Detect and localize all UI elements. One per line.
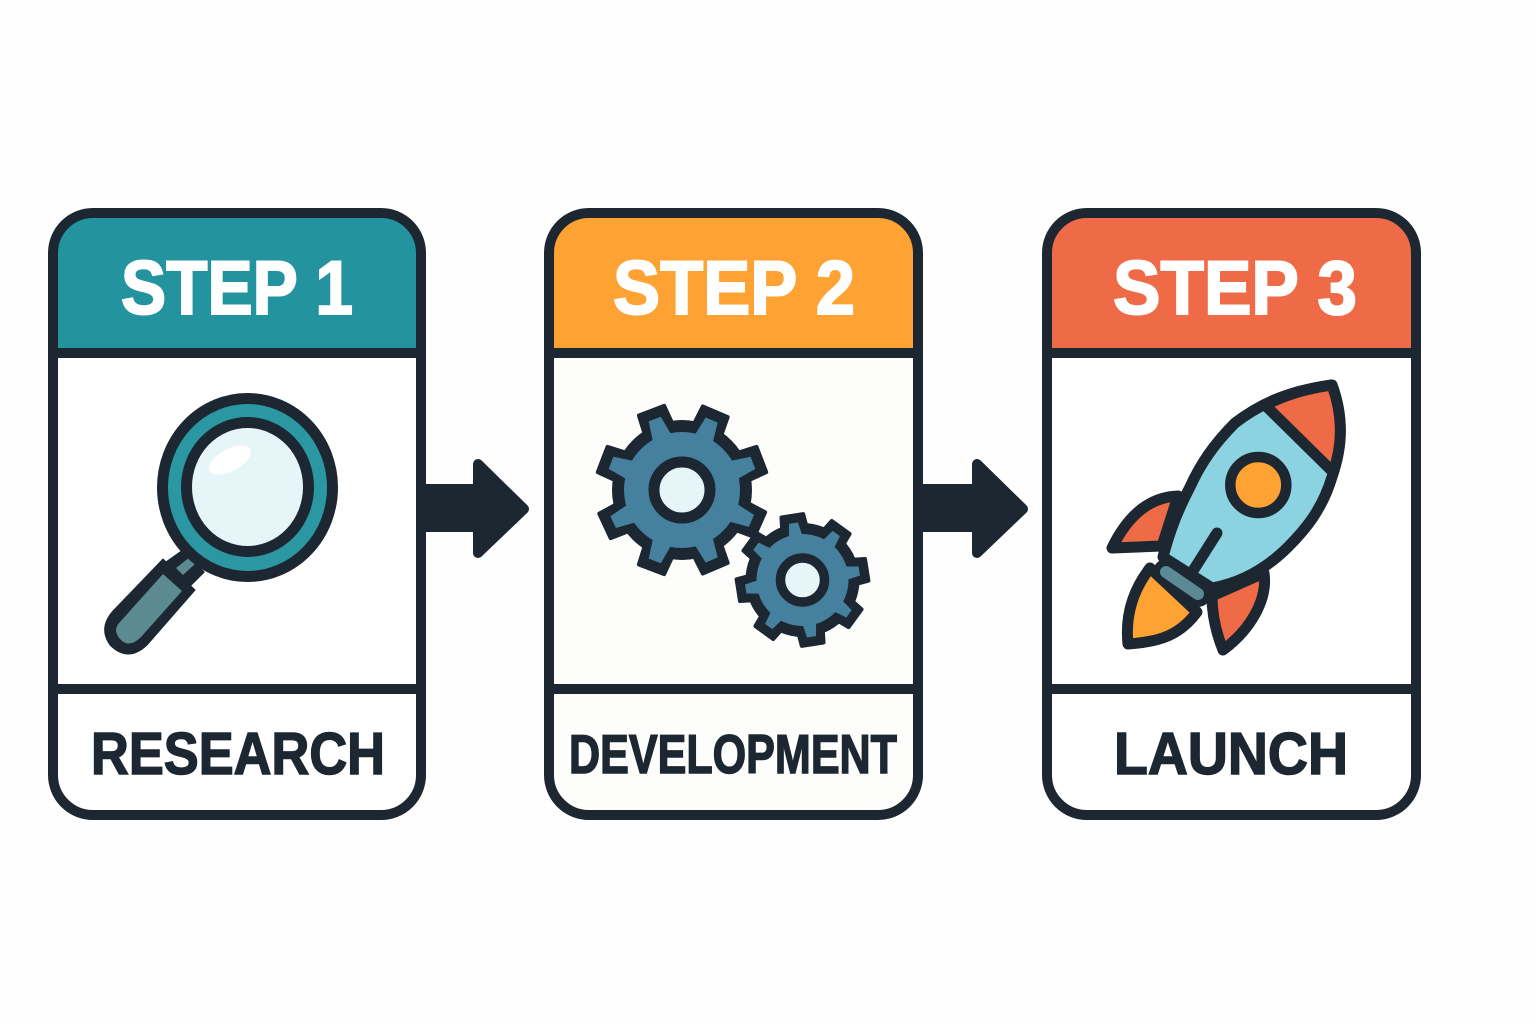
step 1 heading: STEP 1 bbox=[121, 246, 353, 331]
left fin bbox=[1112, 496, 1178, 548]
step 3 label: LAUNCH bbox=[1114, 721, 1348, 787]
icon: rocket bbox=[1112, 385, 1340, 650]
panel: step 2 development bbox=[549, 213, 918, 815]
rocket streak bbox=[1191, 533, 1217, 574]
rocket nozzle bbox=[1166, 572, 1198, 594]
rocket window bbox=[1230, 457, 1286, 513]
step 1 header band bbox=[53, 213, 421, 353]
arrow: step 2 to step 3 bbox=[920, 464, 1023, 553]
step 2 label: DEVELOPMENT bbox=[569, 723, 897, 785]
step 2 heading: STEP 2 bbox=[613, 246, 855, 331]
icon: small gear bbox=[736, 514, 869, 646]
step 2 header band bbox=[549, 213, 918, 353]
icon: magnifying glass bbox=[105, 398, 333, 654]
arrow: step 1 to step 2 bbox=[424, 464, 524, 553]
icon: large gear bbox=[597, 405, 767, 575]
panel: step 1 research bbox=[53, 213, 421, 815]
lower fin bbox=[1212, 573, 1265, 650]
rocket body bbox=[1163, 385, 1340, 588]
rocket nose bbox=[1265, 385, 1340, 472]
panel: step 3 launch bbox=[1047, 213, 1416, 815]
step 3 heading: STEP 3 bbox=[1113, 246, 1357, 331]
flame bbox=[1127, 568, 1197, 644]
step 3 header band bbox=[1047, 213, 1416, 353]
step 1 label: RESEARCH bbox=[91, 721, 385, 787]
